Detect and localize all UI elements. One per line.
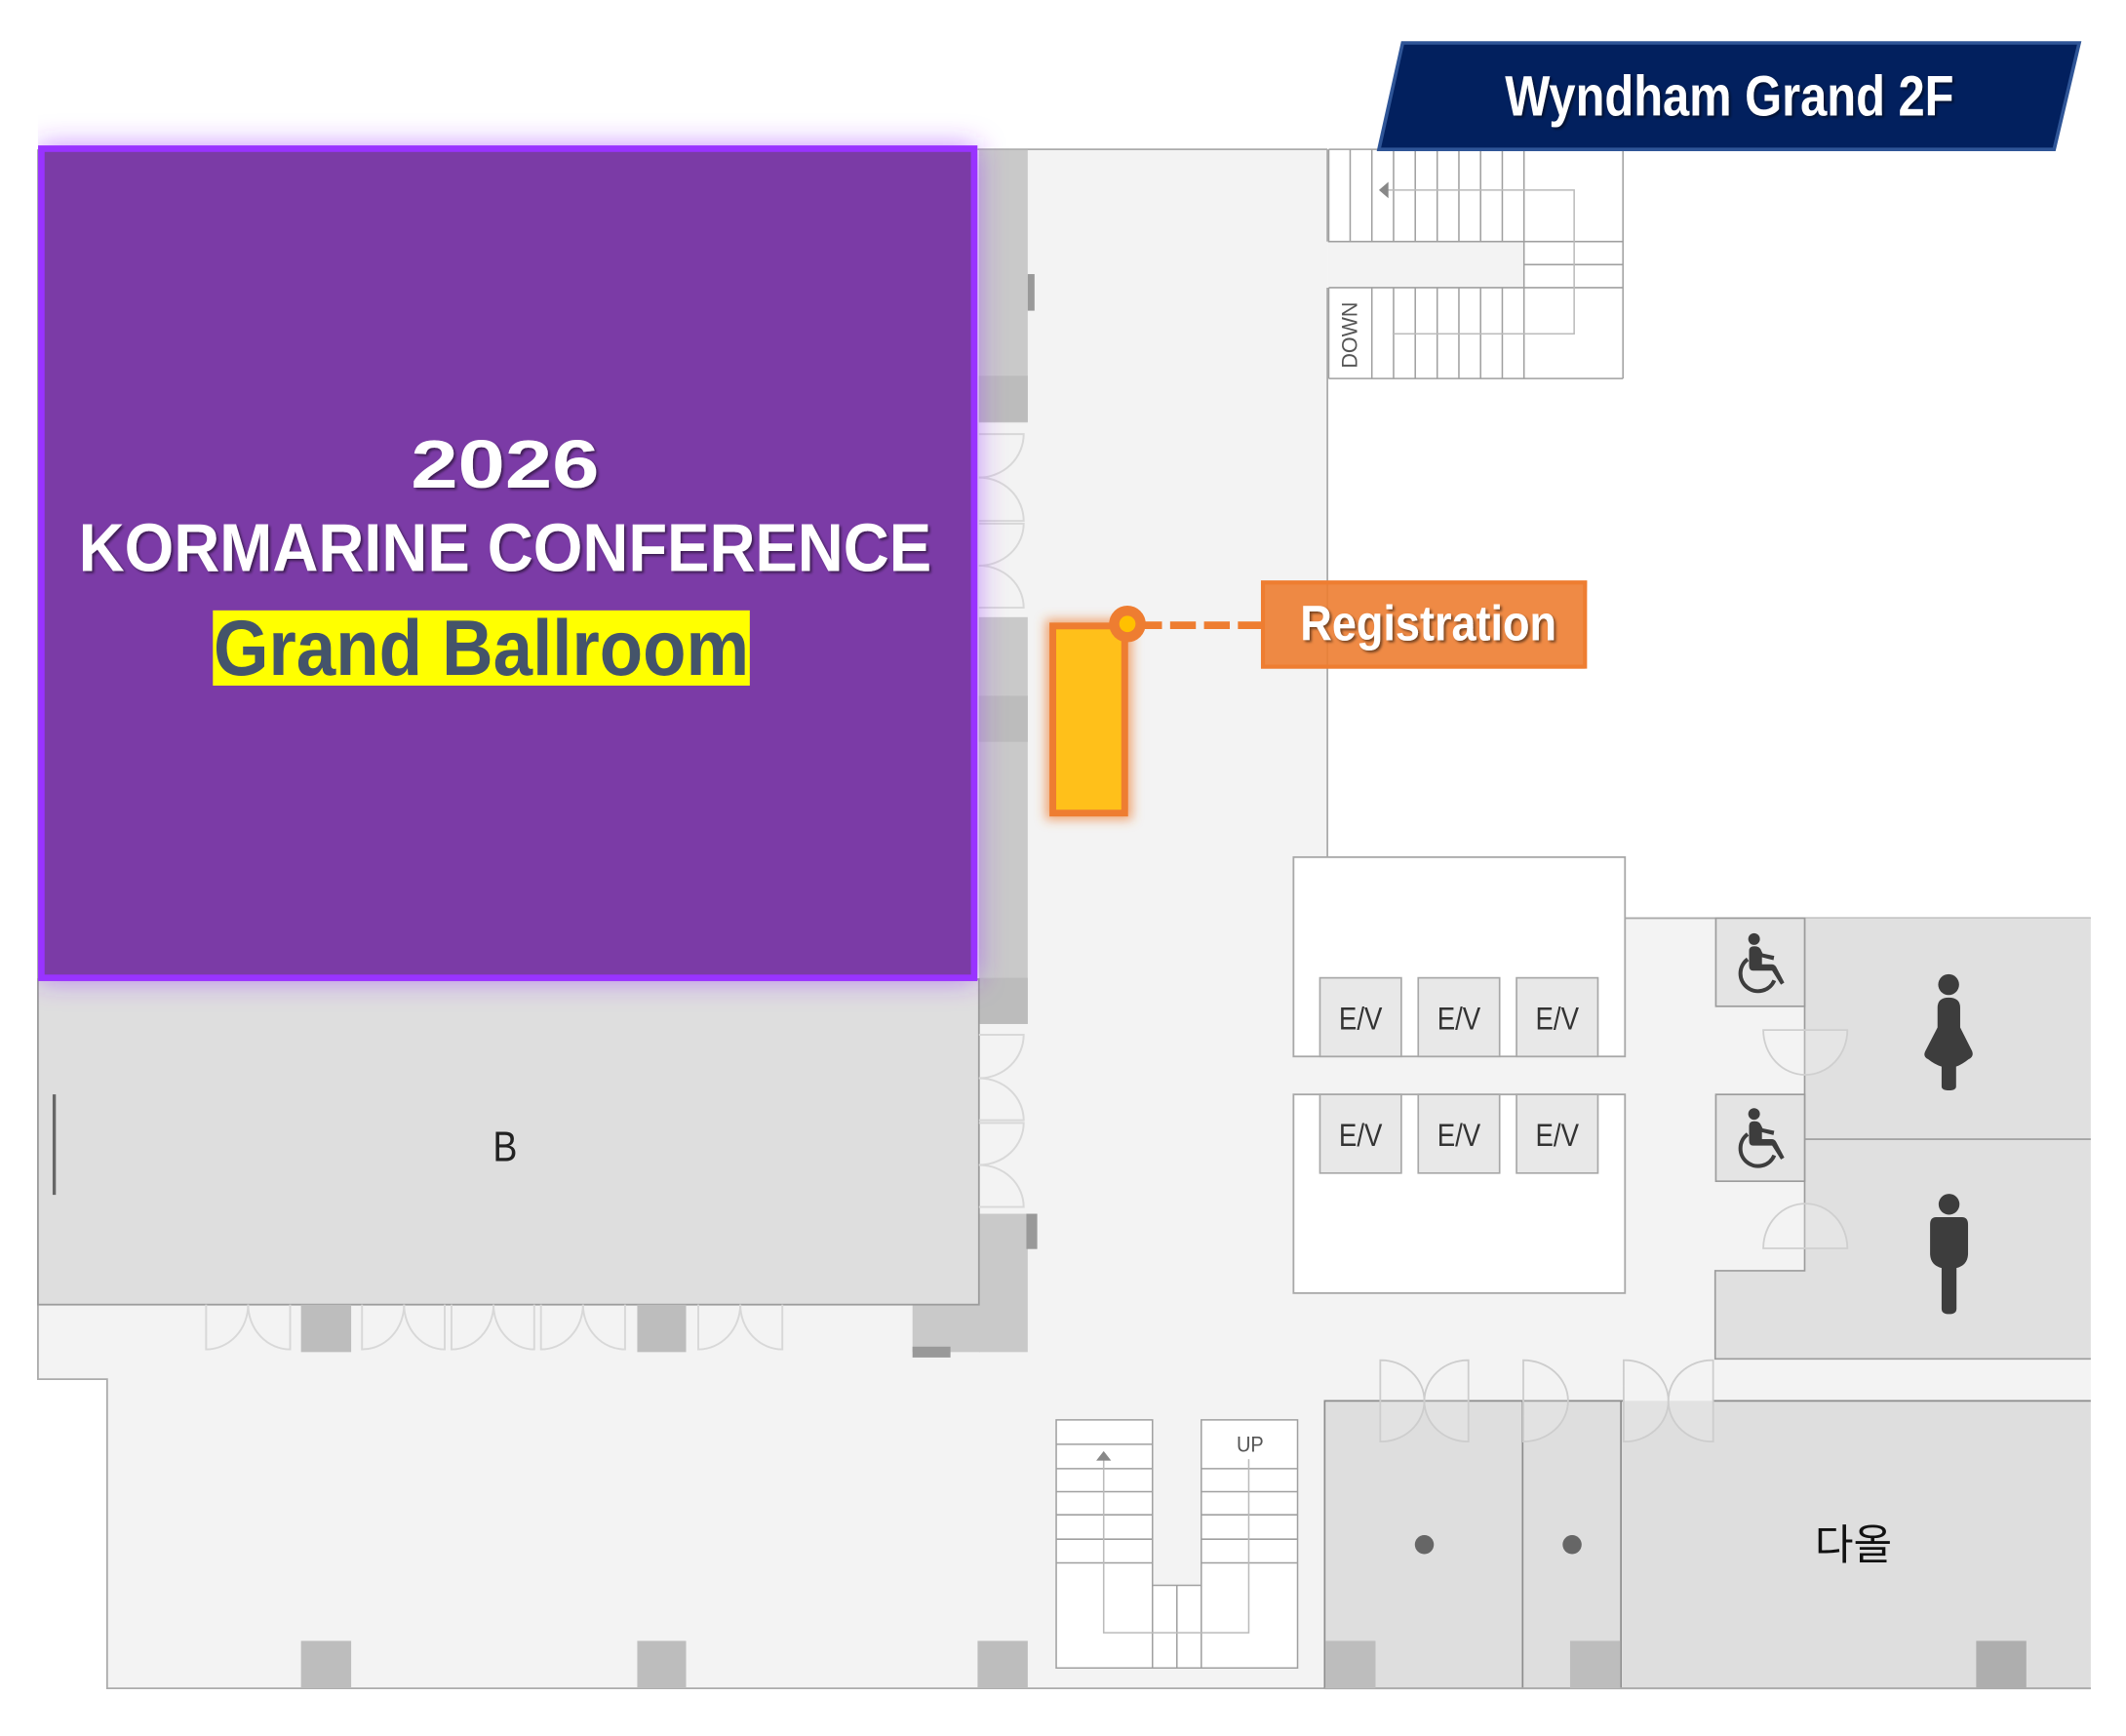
elevator labels: E/V	[1437, 1118, 1481, 1153]
upper stairs: DOWN	[1338, 302, 1362, 369]
elevator labels: E/V	[1536, 1001, 1580, 1036]
elevator labels	[1339, 1001, 1580, 1153]
columns	[301, 1305, 1028, 1688]
accessible stalls	[1715, 918, 1804, 1181]
upper stairs	[1327, 149, 1623, 378]
lower stairs: UP	[1237, 1433, 1264, 1457]
heading conference: KORMARINE CONFERENCE	[79, 510, 931, 586]
room name highlight: Grand Ballroom	[214, 605, 749, 692]
title banner	[1379, 43, 2079, 149]
service strip beside ballroom	[913, 150, 1038, 1358]
icon: woman	[1924, 974, 1973, 1090]
icon: wheelchair lower	[1741, 1108, 1785, 1166]
ballroom glow	[38, 146, 976, 979]
restrooms	[1715, 918, 2091, 1359]
callout: registration	[1261, 580, 1587, 669]
elevator labels: E/V	[1339, 1118, 1383, 1153]
restroom doors	[1763, 1030, 1847, 1248]
room B lower doors	[206, 1305, 782, 1350]
ballroom side doors	[979, 434, 1024, 1207]
elevators	[1319, 978, 1597, 1173]
icon: wheelchair upper	[1741, 933, 1785, 991]
room B: B	[492, 1124, 517, 1170]
room label: 다올	[1815, 1522, 1892, 1569]
columns in rooms	[1325, 1640, 2027, 1688]
elevator lobby	[1293, 857, 1625, 1293]
elevator labels: E/V	[1339, 1001, 1383, 1036]
callout: registration: Registration	[1300, 594, 1556, 651]
elevator labels: E/V	[1536, 1118, 1580, 1153]
elevator labels: E/V	[1437, 1001, 1481, 1036]
callout connector	[1109, 606, 1261, 643]
room dots	[1415, 1535, 1582, 1554]
room B	[38, 979, 979, 1305]
registration area	[1045, 619, 1132, 820]
heading year: 2026	[411, 426, 600, 502]
lower stairs	[1056, 1420, 1298, 1668]
lower right rooms	[1324, 1361, 2091, 1688]
panel: grand ballroom	[41, 148, 974, 978]
icon: man	[1930, 1194, 1968, 1314]
room doors	[1380, 1361, 1713, 1441]
title banner: Wyndham Grand 2F	[1505, 64, 1953, 128]
